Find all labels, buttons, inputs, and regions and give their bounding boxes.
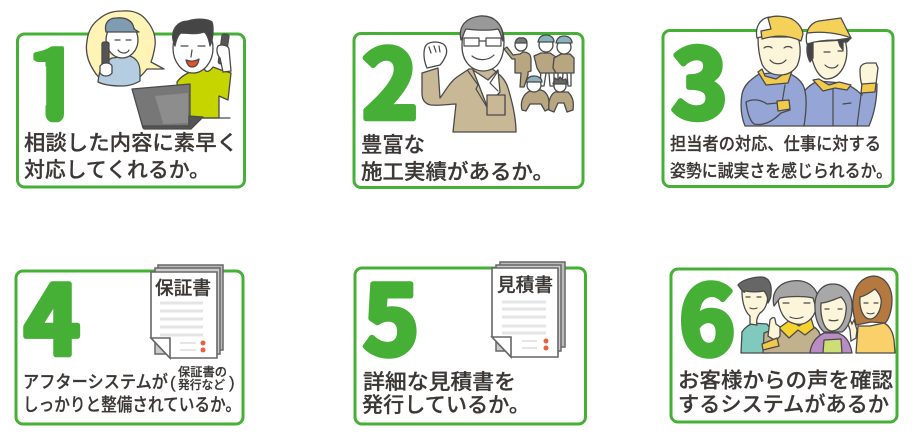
card frame 3 [663,30,893,186]
panel: 3 attitude [663,9,893,186]
right worker body [801,81,877,126]
text: warranty: ( [170,373,176,392]
numeral 1: 1 [26,10,82,148]
text: warranty: しっかりと整備されているか。 [23,395,241,415]
text: consultation [24,132,238,182]
numeral 5: 5 [363,246,419,382]
card frame 2 [354,34,583,188]
icon: two workers in yellow caps [741,16,878,126]
icon: man with raised fist [422,16,516,132]
panel: 2 track record [354,10,583,188]
text: warranty: アフターシステムが [23,372,168,392]
panel: 5 estimate [355,246,586,424]
card frame 5 [355,268,586,424]
icon: speech bubble with worker on phone [86,11,164,86]
text: attitude: 担当者の対応、仕事に対する [670,134,881,154]
panel: 6 customer voices [671,246,897,422]
numeral 2: 2 [362,10,418,146]
icon: group of four customers [738,276,895,353]
text: customer voices: お客様からの声を確認 [678,370,893,392]
icon: estimate document stack [492,262,565,357]
icon: warranty document stack: 保証書 [155,278,211,298]
left worker body [741,72,806,126]
card frame 1 [18,34,244,187]
numeral 6: 6 [679,246,735,382]
text: customer voices: するシステムがあるか [678,394,889,416]
text: track record: 豊富な [361,134,425,157]
text: estimate: 詳細な見積書を [363,371,516,394]
card frame 6 [671,269,897,422]
text: warranty: 発行など [178,378,225,392]
text: warranty: ) [229,373,235,392]
panel: 1 consultation [18,10,244,187]
text: attitude [670,134,892,181]
text: consultation: 相談した内容に素早く [24,132,238,155]
card frame 4 [16,271,243,424]
text: estimate: 発行しているか。 [362,394,530,417]
text: consultation: 対応してくれるか。 [24,159,210,182]
icon: small crew of workers [504,35,574,112]
icon: estimate document stack: 見積書 [497,274,553,296]
icon: man with phone and laptop [132,19,231,129]
numeral 4: 4 [24,246,80,382]
text: attitude: 姿勢に誠実さを感じられるか。 [670,161,892,181]
text: track record: 施工実績があるか。 [361,161,554,184]
text: customer voices [678,370,893,416]
text: track record [361,134,554,184]
text: estimate [362,371,530,417]
icon: warranty document stack [151,265,223,358]
numeral 3: 3 [672,9,728,146]
panel: 4 warranty [16,246,243,424]
text: warranty: 保証書の [178,364,227,379]
text: warranty [23,364,241,415]
